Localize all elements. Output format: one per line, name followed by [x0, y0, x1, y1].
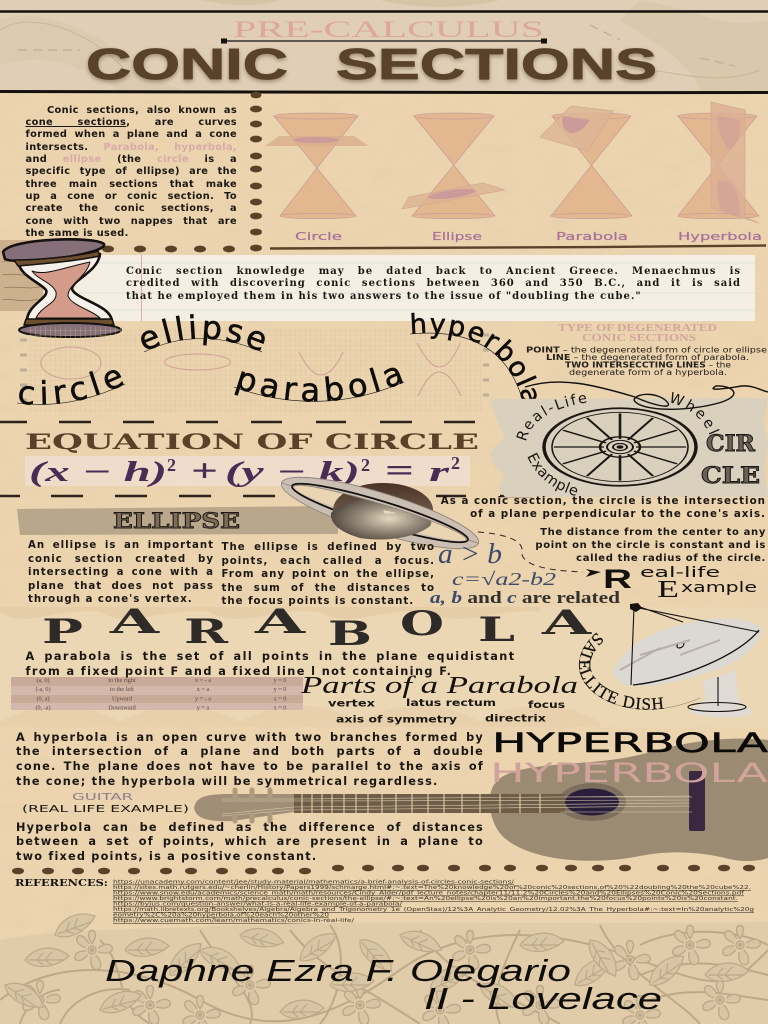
curved words: real-life wheel example: Example	[528, 452, 578, 496]
text: ellipse left column: An ellipse is an important	[28, 540, 214, 551]
text: hyperbola distance definition: Hyperbola can be defined as the difference of distances	[16, 820, 484, 834]
cone: parabola	[540, 106, 632, 219]
parabola parts labels: vertex	[328, 698, 376, 710]
parabola table: x = 0	[274, 704, 286, 712]
references list: https://www.snow.edu/academics/science_math/math/resources/Cindy_Alder/pdf_lecture_notes/chapter11/11.2%20Circles%20and%20Ellipses%20Conic%20Sections.pdf	[113, 890, 745, 896]
heading: parabola letters	[42, 602, 592, 654]
degenerate forms text: LINE – the degenerated form of parabola.	[546, 353, 749, 362]
real-life example label	[603, 564, 757, 603]
references list	[113, 880, 755, 924]
curved label: satellite dish	[578, 632, 700, 710]
equation of circle: r	[429, 456, 450, 488]
parabola table: to the right	[108, 677, 136, 684]
text: parabola definition: from a fixed point F and a fixed line l not containing F.	[26, 665, 452, 678]
real-life example label: E	[657, 577, 679, 603]
heading: parabola letters: O	[400, 604, 444, 644]
squiggle line	[525, 382, 768, 409]
heading: degenerated conic sections	[558, 323, 717, 344]
curved words: conic names: ellipse	[141, 314, 265, 350]
text: history note: credited with discovering conic sections between 360 and 350 B.C., and it is said	[126, 278, 741, 289]
cone: hyperbola	[678, 102, 759, 223]
parabola parts labels: latus rectum	[406, 698, 496, 709]
text: hyperbola definition: the cone; the hyperbola will be symmetrical regardless.	[16, 775, 438, 788]
title: conic sections: CONIC	[86, 40, 288, 89]
cone labels: Parabola	[556, 230, 628, 243]
wheel torn paper	[490, 398, 768, 497]
curved words: real-life wheel example	[516, 392, 720, 496]
parabola parts labels: axis of symmetry	[336, 714, 458, 726]
cone: circle	[265, 113, 369, 219]
degenerate forms text: TWO INTERSECCTING LINES – the	[565, 360, 731, 369]
text: history note: Conic section knowledge may be dated back to Ancient Greece. Menaechmus is	[126, 266, 741, 276]
heading: hyperbola	[490, 728, 768, 789]
text: hyperbola distance definition: two fixed points, is a positive constant.	[16, 850, 317, 863]
cone labels: Circle	[295, 230, 342, 243]
wheel side label: cir cle	[701, 431, 760, 489]
note paper	[0, 240, 755, 321]
text: conic sections intro: specific type of ellipse) are the	[26, 166, 237, 177]
text: history note: that he employed them in his two answers to the issue of "doubling the cube."	[126, 290, 642, 302]
equation of circle: +	[191, 452, 218, 488]
parabola table: y = 0	[274, 677, 286, 684]
author name and class: II - Lovelace	[424, 981, 662, 1016]
parabola table: x = - a	[195, 677, 211, 684]
text: ellipse right column: points, each called a focus.	[222, 556, 435, 567]
degenerate forms text: POINT – the degenerated form of circle or ellipse	[526, 346, 767, 354]
text: circle definition	[440, 494, 766, 520]
lace floral footer	[0, 909, 768, 1024]
heading: parabola letters: A	[253, 602, 306, 642]
heading: degenerated conic sections: CONIC SECTIONS	[582, 333, 697, 344]
cone labels	[295, 230, 762, 243]
curved words: real-life wheel example: Wheel	[671, 392, 720, 434]
degenerate forms text: degenerate form of a hyperbola.	[569, 368, 727, 377]
icon: hourglass	[3, 239, 121, 337]
equation of circle	[25, 452, 470, 488]
text: parabola definition: A parabola is the set of all points in the plane equidistant	[26, 650, 516, 663]
heading: parabola letters: A	[108, 602, 160, 642]
curved words: real-life wheel example: Real-Life	[516, 394, 586, 440]
text: history note	[126, 266, 741, 302]
text: circle radius: point on the circle is constant and is	[535, 540, 766, 551]
equation of circle: (y − k)	[225, 456, 360, 488]
text: conic sections intro: create the conic sections, a	[26, 203, 237, 214]
guitar real-life label: (REAL LIFE EXAMPLE)	[22, 804, 189, 815]
dotted divider: references	[12, 865, 755, 874]
parabola band	[0, 607, 768, 727]
text: circle definition: As a conic section, the circle is the intersection	[441, 494, 766, 506]
equation of circle: (x − h)	[29, 456, 167, 488]
text: ellipse left column: conic section created by	[28, 554, 214, 565]
parabola parts labels: focus	[528, 700, 565, 711]
parabola table: y = a	[197, 704, 209, 712]
heading: parabola letters: L	[478, 610, 515, 650]
curved words: conic names: circle	[19, 370, 124, 405]
cone labels: Ellipse	[432, 230, 482, 243]
title: conic sections: SECTIONS	[336, 40, 657, 89]
degenerate conics graph panel	[20, 327, 489, 413]
text: circle definition: of a plane perpendicular to the cone's axis.	[470, 508, 766, 520]
real-life example label: xample	[681, 580, 757, 596]
heading: parabola letters: R	[184, 612, 229, 652]
text: ellipse right column: The ellipse is defined by two	[222, 542, 435, 553]
ellipse formulas: a, b and c are related	[430, 588, 620, 607]
parabola table: y = 0	[274, 686, 286, 693]
text: conic sections intro: three main sections that make	[26, 179, 237, 190]
dotted divider: column and row	[102, 92, 262, 252]
real-life example label: eal-life	[640, 565, 720, 581]
references list: https://byjus.com/question-answer/what-is-a-real-life-example-of-a-parabola/	[113, 902, 402, 908]
heading: parabola letters: P	[42, 612, 83, 652]
text: ellipse right column	[222, 542, 435, 607]
equation dashed rules	[0, 422, 532, 496]
cone: ellipse	[402, 113, 505, 219]
guitar real-life label	[22, 792, 189, 815]
ellipse formulas	[430, 539, 620, 607]
heading: hyperbola: HYPERBOLA	[490, 758, 768, 789]
text: conic sections intro: cone sections, are curves	[26, 117, 237, 128]
parabola table	[11, 677, 303, 712]
parabola table: x = a	[197, 686, 209, 693]
icon: wagon wheel	[544, 408, 696, 486]
parabola table: x = 0	[274, 696, 286, 702]
parabola table: (0, -a)	[35, 704, 51, 712]
text: conic sections intro: cone with two nappes that are	[26, 216, 237, 227]
parabola table: (a, 0)	[36, 677, 50, 684]
degenerate forms text	[526, 346, 767, 377]
divider line	[270, 246, 766, 249]
parabola table: Downward	[108, 704, 137, 712]
ellipse banner	[17, 506, 338, 535]
references list: https://sites.math.rutgers.edu/~cherlin/History/Papers1999/schmarge.html#:~:text=The%20knowledge%20of%20conic%20sections,of%20%22doubling%20the%20cube%22.	[113, 885, 751, 891]
heading: hyperbola: HYPERBOLA	[492, 728, 768, 759]
equation of circle: =	[385, 452, 414, 488]
heading: references: REFERENCES:	[15, 878, 108, 889]
text: conic sections intro: up a cone or conic section. To	[26, 191, 237, 202]
text: conic sections intro: intersects. Parabola, hyperbola,	[26, 142, 237, 153]
parabola table: Upward	[112, 696, 133, 702]
author name and class: Daphne Ezra F. Olegario	[105, 953, 571, 988]
text: conic sections intro: Conic sections, also known as	[47, 105, 237, 116]
dashed arrow	[478, 532, 601, 577]
text: ellipse left column: plane that does not pass	[28, 581, 214, 592]
parabola parts labels	[328, 698, 565, 726]
heading: parabola letters: B	[328, 614, 372, 654]
title: conic sections	[86, 40, 657, 89]
curved words: conic names: parabola	[234, 367, 404, 402]
text: conic sections intro: formed when a plane and a cone	[26, 129, 237, 140]
text: parabola definition	[26, 650, 516, 678]
heading: parabola letters: A	[540, 603, 592, 643]
text: hyperbola definition: the intersection of a plane and both parts of a double	[16, 745, 484, 758]
title: pre-calculus: PRE-CALCULUS	[233, 17, 544, 43]
equation of circle: 2	[167, 455, 176, 475]
references list: https://www.brightstorm.com/math/precalculus/conic-sections/the-ellipse/#:~:text=An%20ellipse%20is%20an%20important,the%20focus%20points%20is%20constant.	[113, 896, 738, 902]
text: ellipse left column	[28, 540, 214, 605]
text: circle radius: called the radius of the circle.	[576, 553, 766, 564]
heading: ellipse: ELLIPSE	[113, 508, 240, 533]
references list: eometry%2C%20a%20hyperbola,of%20each%20other%20	[113, 912, 330, 918]
text: ellipse right column: the focus points is constant.	[222, 596, 414, 607]
ellipse formulas: c=√a2-b2	[452, 569, 556, 589]
curved words: conic names: hyperbola	[411, 312, 537, 399]
heading: equation of circle: EQUATION OF CIRCLE	[25, 429, 479, 454]
text: circle radius: The distance from the center to any	[540, 526, 766, 538]
title rule	[221, 38, 547, 44]
ellipse formulas: a > b	[438, 539, 502, 570]
references list: https://math.libretexts.org/Bookshelves/Algebra/Algebra_and_Trigonometry_1e_(OpenStax)/12%3A_Analytic_Geometry/12.02%3A_The_Hyperbola#:~:text=In%20analytic%20g	[113, 907, 755, 913]
parabola table: (0, a)	[36, 696, 50, 702]
parabola table: to the left	[110, 686, 134, 693]
text: ellipse left column: intersecting a cone with a	[28, 567, 214, 578]
curved label: satellite dish: SATELLITE DISH	[579, 633, 664, 710]
wheel side label: cir cle: CIR	[706, 431, 756, 457]
text: ellipse right column: the sum of the distances to	[222, 583, 435, 594]
guitar	[194, 739, 768, 861]
text: hyperbola distance definition	[16, 820, 484, 863]
header band	[0, 0, 768, 93]
guitar real-life label: GUITAR	[72, 792, 133, 803]
text: hyperbola definition: cone. The plane does not have to be parallel to the axis of	[16, 760, 484, 773]
text: hyperbola distance definition: between a set of points, which are present in a plane to	[16, 835, 484, 848]
author name and class	[105, 953, 662, 1016]
text: circle radius	[535, 526, 766, 564]
text: hyperbola definition: A hyperbola is an open curve with two branches formed by	[16, 730, 484, 744]
wheel side label: cir cle: CLE	[701, 463, 760, 489]
real-life example label: R	[603, 564, 632, 594]
icon: satellite dish	[613, 603, 762, 717]
references list: https://www.cuemath.com/learn/mathematics/conics-in-real-life/	[113, 918, 354, 924]
text: conic sections intro: the same is used.	[26, 228, 129, 239]
parabola table: (-a, 0)	[35, 686, 51, 693]
text: conic sections intro	[26, 105, 237, 239]
cone labels: Hyperbola	[678, 230, 762, 243]
icon: ringed planet	[276, 464, 484, 562]
curved words: conic names	[17, 312, 537, 405]
heading: degenerated conic sections: TYPE OF DEGENERATED	[558, 323, 717, 334]
text: hyperbola definition	[16, 730, 484, 788]
parabola parts labels: directrix	[485, 714, 547, 724]
references list: https://unacademy.com/content/jee/study-material/mathematics/a-brief-analysis-of-circles-conic-sections/	[113, 880, 514, 886]
text: conic sections intro: and ellipse (the circle is a	[26, 154, 237, 165]
equation of circle: 2	[451, 453, 460, 473]
parabola table: y = - a	[195, 696, 211, 702]
equation of circle: 2	[361, 455, 370, 475]
text: ellipse right column: From any point on the ellipse,	[222, 569, 435, 580]
heading: parts of a parabola: Parts of a Parabola	[300, 673, 578, 699]
text: ellipse left column: through a cone's vertex.	[28, 594, 193, 605]
